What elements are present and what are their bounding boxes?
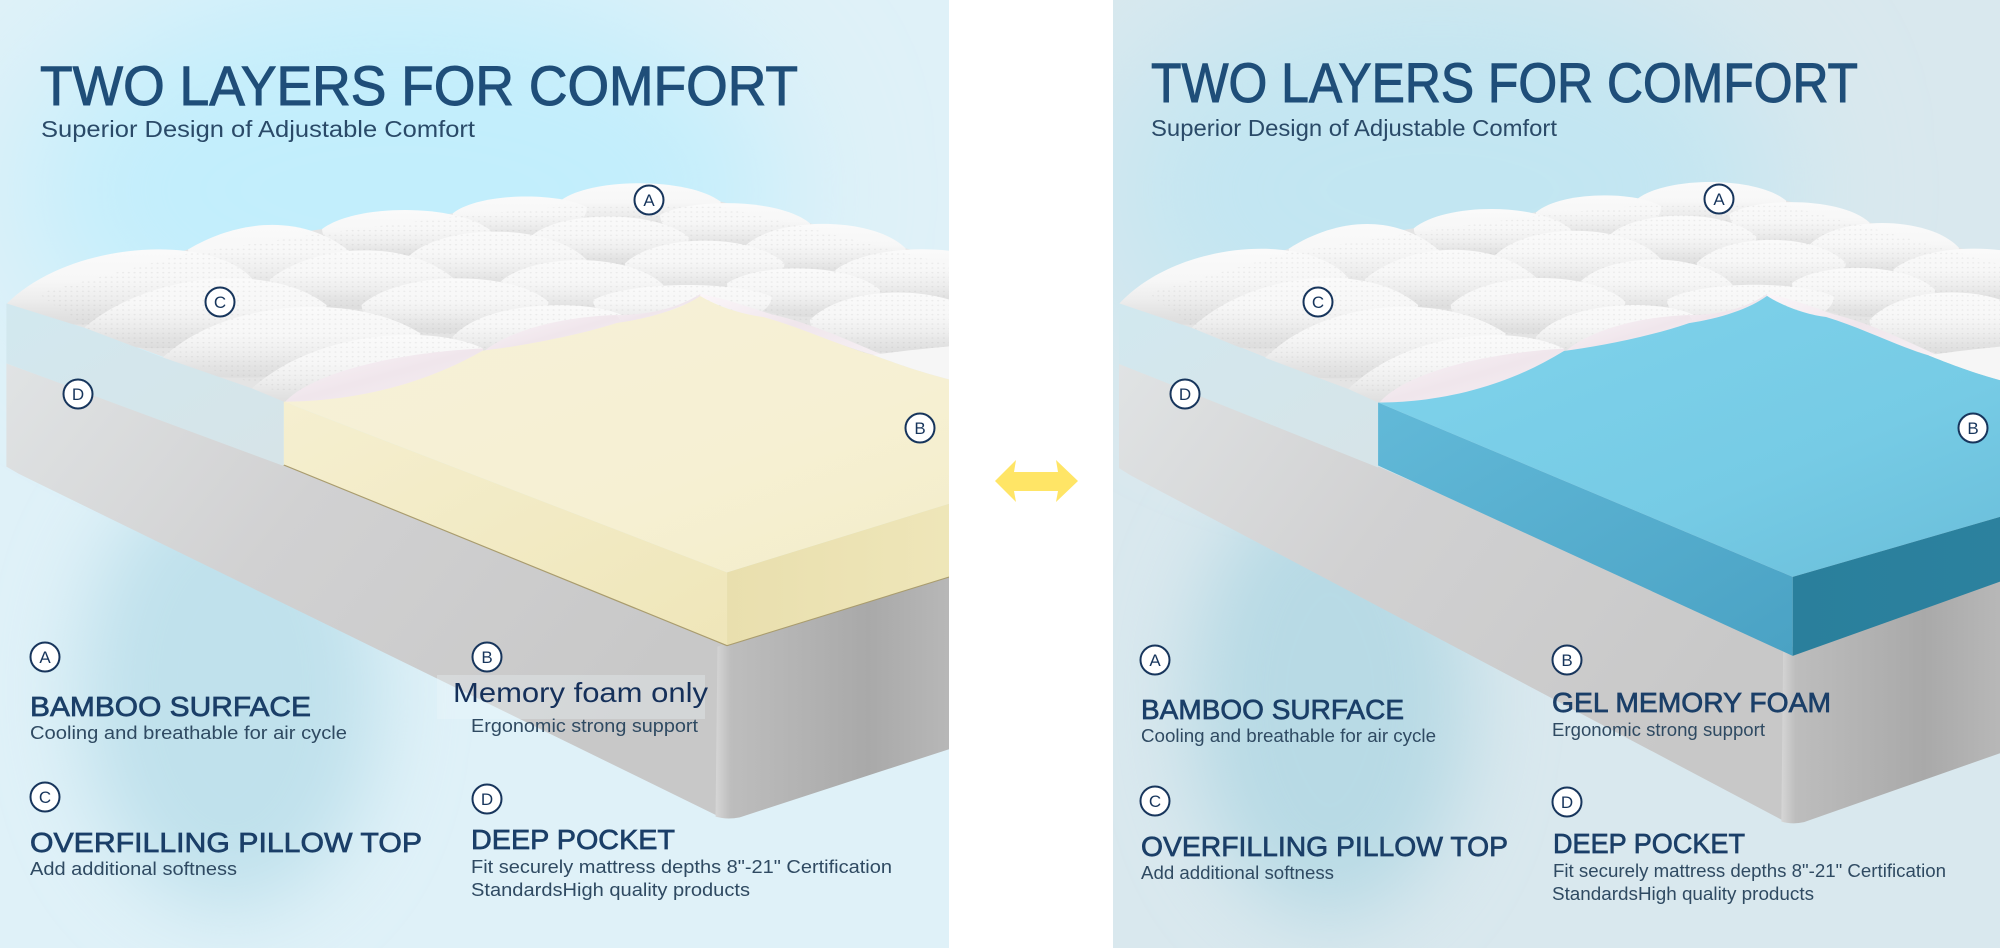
left panel background bbox=[0, 0, 949, 948]
legend D: deep pocket: Fit securely mattress depths 8"-21" Certification bbox=[471, 857, 892, 877]
callout A on mattress: A bbox=[643, 191, 655, 210]
legend B: memory foam only bbox=[437, 642, 708, 736]
callout C on mattress: C bbox=[1312, 293, 1324, 312]
callout D on mattress: D bbox=[72, 385, 84, 404]
callout A on mattress: A bbox=[1713, 190, 1725, 209]
foam front side: blue gel bbox=[1378, 403, 1793, 656]
legend B: memory foam only: B bbox=[481, 648, 493, 667]
callout D on mattress bbox=[1170, 380, 1200, 408]
mattress body and pillow top, reused bbox=[1119, 182, 2000, 823]
legend C: overfilling pillow top bbox=[1140, 786, 1508, 883]
legend D: deep pocket: DEEP POCKET bbox=[471, 824, 675, 855]
legend A: bamboo surface: Cooling and breathable for air cycle bbox=[30, 723, 347, 743]
callout A on mattress bbox=[634, 186, 664, 214]
legend D: deep pocket: DEEP POCKET bbox=[1553, 828, 1745, 859]
callout A on mattress bbox=[1704, 184, 1734, 214]
title: TWO LAYERS FOR COMFORT bbox=[40, 54, 798, 117]
legend C: overfilling pillow top: OVERFILLING PILLOW TOP bbox=[30, 827, 422, 858]
foam front side: cream memory foam bbox=[284, 402, 727, 646]
legend C: overfilling pillow top: Add additional softness bbox=[30, 859, 237, 879]
legend B: memory foam only: Memory foam only bbox=[453, 677, 708, 708]
legend A: bamboo surface: A bbox=[1149, 651, 1161, 670]
panel: gel memory foam (right) bbox=[1100, 0, 2000, 948]
legend D: deep pocket: D bbox=[1561, 793, 1573, 812]
legend C: overfilling pillow top: OVERFILLING PILLOW TOP bbox=[1141, 831, 1508, 862]
foam top face: blue gel bbox=[1378, 296, 2000, 577]
callout B on mattress: B bbox=[914, 419, 926, 438]
legend C: overfilling pillow top: C bbox=[39, 788, 51, 807]
panel: memory foam only (left) bbox=[0, 0, 1020, 948]
callout D on mattress: D bbox=[1179, 385, 1191, 404]
callout C on mattress: C bbox=[214, 293, 226, 312]
right panel background bbox=[1100, 0, 2000, 948]
legend D: deep pocket bbox=[471, 784, 892, 900]
legend A: bamboo surface bbox=[1140, 646, 1436, 746]
mattress body and pillow top bbox=[6, 183, 1020, 819]
mattress illustration (left) bbox=[6, 183, 1020, 819]
legend D: deep pocket: StandardsHigh quality products bbox=[1552, 884, 1814, 904]
legend C: overfilling pillow top: C bbox=[1149, 792, 1161, 811]
legend A: bamboo surface: A bbox=[39, 648, 51, 667]
legend B: gel memory foam bbox=[1552, 646, 1831, 740]
legend B: memory foam only: Ergonomic strong support bbox=[471, 716, 698, 736]
callout D on mattress bbox=[64, 380, 92, 408]
subtitle: Superior Design of Adjustable Comfort bbox=[1151, 115, 1558, 141]
foam right side: blue gel bbox=[1793, 498, 2000, 656]
legend A: bamboo surface: BAMBOO SURFACE bbox=[30, 691, 311, 722]
callout B on mattress bbox=[1958, 414, 1988, 442]
pillow top side band bbox=[6, 303, 284, 466]
legend B: gel memory foam: Ergonomic strong support bbox=[1552, 720, 1765, 740]
deep pocket right side bbox=[716, 553, 1020, 819]
foam right side: cream memory foam bbox=[727, 504, 949, 645]
foam top face: cream memory foam bbox=[284, 296, 1020, 572]
arrow: two-way comparison bbox=[995, 460, 1078, 502]
callout B on mattress bbox=[906, 414, 934, 442]
subtitle: Superior Design of Adjustable Comfort bbox=[41, 116, 476, 142]
legend A: bamboo surface: BAMBOO SURFACE bbox=[1141, 694, 1404, 725]
fabric fold at right edge, reused bbox=[1929, 340, 2000, 397]
legend D: deep pocket: StandardsHigh quality products bbox=[471, 880, 750, 900]
title: TWO LAYERS FOR COMFORT bbox=[1151, 51, 1858, 114]
deep pocket front side bbox=[6, 363, 727, 817]
callout B on mattress: B bbox=[1967, 419, 1979, 438]
callout C on mattress bbox=[1304, 288, 1332, 316]
pillow top quilted surface bbox=[6, 183, 1020, 405]
legend A: bamboo surface: Cooling and breathable for air cycle bbox=[1141, 726, 1436, 746]
foam base shadow line bbox=[284, 465, 1020, 646]
mattress illustration (right) bbox=[1119, 182, 2000, 823]
callout C on mattress bbox=[206, 288, 234, 316]
legend B: gel memory foam: GEL MEMORY FOAM bbox=[1552, 687, 1831, 718]
legend D: deep pocket: Fit securely mattress depths 8"-21" Certification bbox=[1553, 861, 1946, 881]
inner fabric lining bbox=[284, 294, 883, 403]
legend D: deep pocket: D bbox=[481, 790, 493, 809]
fabric fold at right edge bbox=[873, 340, 1020, 397]
legend A: bamboo surface bbox=[30, 642, 347, 743]
legend D: deep pocket bbox=[1552, 788, 1946, 904]
legend C: overfilling pillow top: Add additional softness bbox=[1141, 863, 1334, 883]
legend C: overfilling pillow top bbox=[30, 782, 422, 879]
legend B: gel memory foam: B bbox=[1561, 651, 1573, 670]
